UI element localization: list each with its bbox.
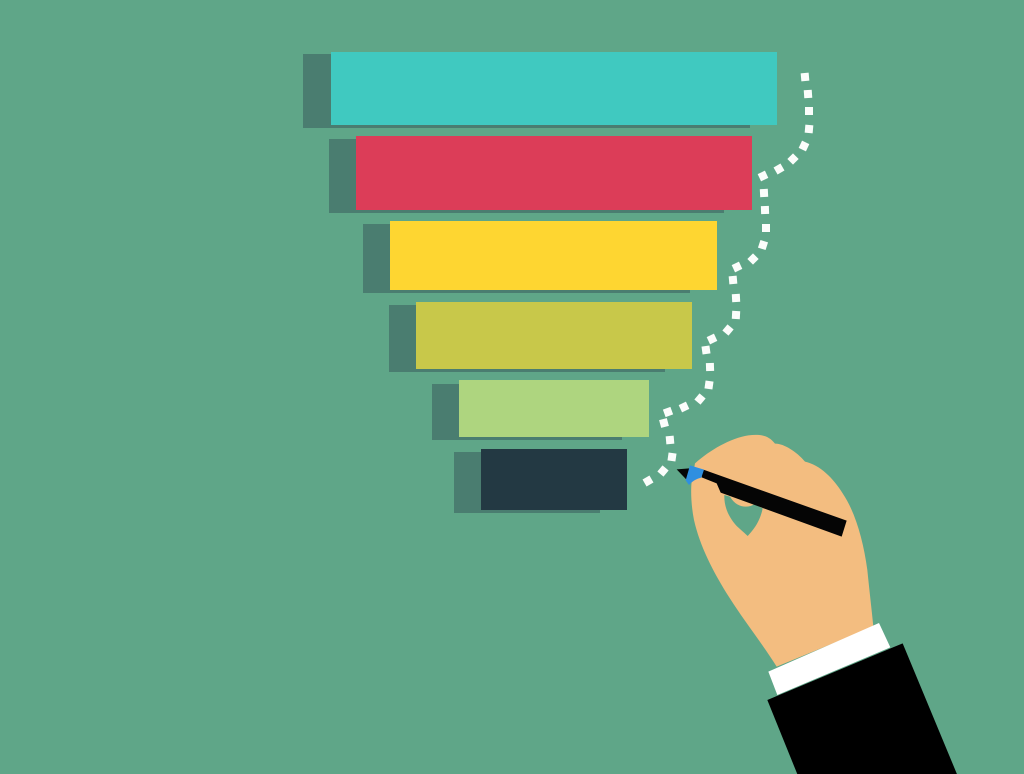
jacket sleeve — [767, 643, 957, 774]
funnel bar 4: olive — [389, 302, 692, 372]
icon: hand — [691, 435, 873, 667]
hand holding pen with shirt cuff and jacket sleeve — [677, 435, 957, 774]
funnel bar 5: light green — [432, 380, 649, 440]
icon: pen — [677, 465, 847, 537]
funnel chart — [303, 52, 777, 513]
funnel bar 2: red — [329, 136, 752, 213]
shirt cuff — [768, 623, 890, 695]
funnel bar 6: dark navy — [454, 449, 627, 513]
funnel bar 3: yellow — [363, 221, 717, 293]
pen grip: blue band — [686, 465, 704, 485]
funnel bar 1: teal — [303, 52, 777, 128]
dotted line drawn by the pen — [643, 73, 813, 486]
